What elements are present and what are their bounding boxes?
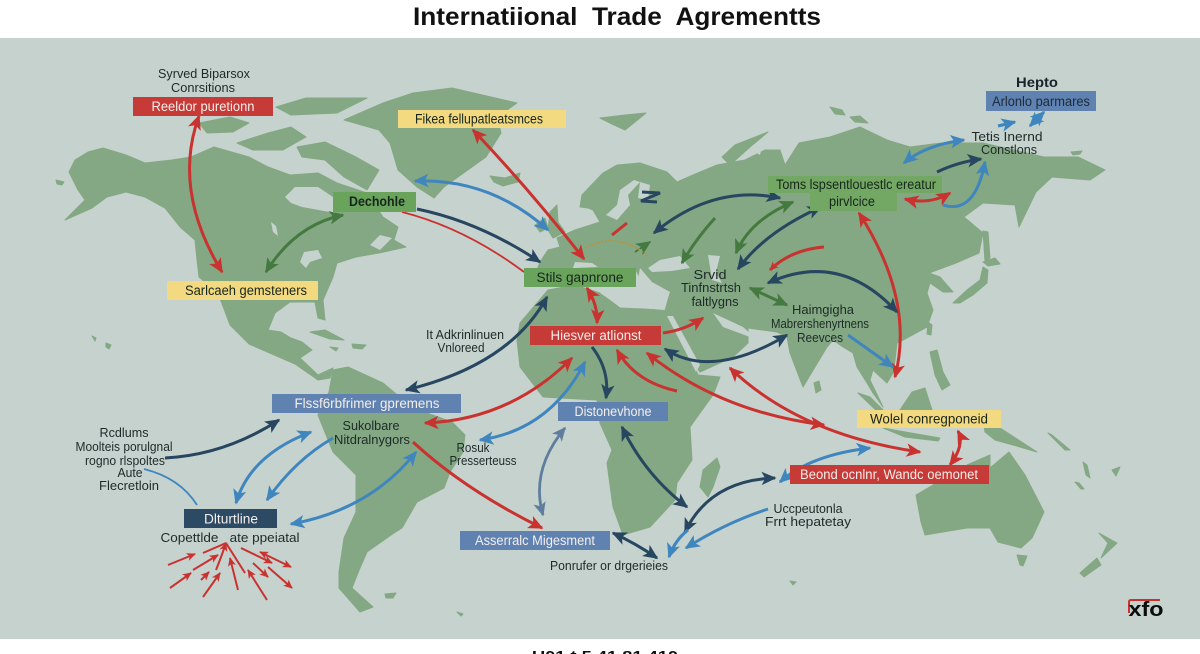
caption: central asia: Srvid — [694, 267, 726, 282]
arrow: blue pacific two — [267, 438, 333, 500]
caption: pacific: Rcdlums — [100, 425, 149, 440]
caption: south africa: Ponrufer or drgerieies — [550, 558, 668, 573]
arrow: navy atlantic south — [406, 297, 547, 390]
caption: south atlantic — [450, 440, 517, 468]
caption: Hepto: Hepto — [1016, 74, 1058, 90]
land: Madagascar — [700, 458, 720, 497]
label: navy pacific: Dlturtline — [204, 512, 258, 526]
label: red top left: Reeldor puretionn — [152, 99, 254, 114]
label: blue africa: Distonevhone — [574, 404, 652, 419]
caption: far east: Constlons — [981, 142, 1037, 157]
arrow: blue atlantic — [415, 181, 548, 230]
land: Eurasia — [535, 127, 1105, 407]
arrow: navy africa to india — [665, 335, 787, 362]
caption: atlantic: Vnloreed — [438, 340, 484, 355]
arrow: red greenland to europe — [473, 130, 584, 259]
arrow: green central asia — [750, 288, 787, 305]
caption: india: Reevces — [797, 330, 843, 345]
arrow: navy indian ocean — [685, 478, 775, 532]
label: blue africa — [558, 402, 668, 421]
arrow: navy russia — [654, 195, 780, 233]
label: red top left — [133, 97, 273, 116]
title: Internatiional Trade Agrementts — [413, 3, 821, 31]
caption: india — [771, 302, 869, 345]
label: blue far east: Arlonlo parmares — [992, 94, 1090, 109]
caption: pacific: rogno rlspoltes — [85, 453, 165, 468]
water: Hudson Bay — [285, 187, 335, 213]
land: Greenland — [344, 88, 517, 198]
caption: indian ocean — [765, 501, 852, 529]
caption: indian ocean: Frrt hepatetay — [765, 514, 852, 529]
arrow: red short europe — [612, 223, 627, 235]
label: yellow north america: Sarlcaeh gemsteners — [185, 283, 307, 298]
arrow: red africa to india ocean — [647, 353, 824, 425]
caption: atlantic — [426, 327, 504, 355]
arrow: thin red atlantic — [402, 212, 524, 272]
label: yellow south-east asia — [857, 410, 1001, 428]
arrow: red to arabia — [663, 318, 703, 333]
label: yellow north america — [167, 281, 318, 300]
land: Caribbean islands — [310, 330, 366, 351]
label: green europe — [524, 268, 636, 287]
land: small south atlantic islands — [385, 593, 463, 616]
caption: top left: Syrved Biparsox — [158, 66, 250, 81]
caption: india: Haimgigha — [792, 302, 855, 317]
arrow: navy southern africa — [622, 427, 687, 507]
caption: far east: Tetis Inernd — [972, 129, 1042, 144]
arrow: red south atlantic — [413, 442, 542, 528]
arrow: red arabian sea — [730, 368, 920, 452]
land: North America — [65, 147, 406, 380]
caption: pacific: Aute — [118, 465, 142, 480]
arrow: red north america — [190, 116, 222, 272]
arrow: red far east — [905, 193, 950, 201]
caption: south america: Nitdralnygors — [334, 432, 410, 447]
land: British Isles — [535, 205, 565, 238]
arrow: blue east siberia — [904, 140, 964, 163]
arrow: green short europe — [635, 242, 650, 252]
land: Africa — [517, 285, 720, 535]
land: Sri Lanka and Japan — [814, 258, 1000, 393]
land: Arctic Ocean islands — [600, 107, 1082, 155]
land: Tasmania and New Zealand — [790, 433, 1120, 585]
caption: central asia: faltlygns — [692, 294, 739, 309]
arrows between trade labels — [144, 112, 1044, 558]
arrow: red europe to africa — [587, 288, 597, 323]
caption: top left: Conrsitions — [171, 80, 235, 95]
caption: atlantic: It Adkrinlinuen — [426, 327, 504, 342]
arrow cluster: red burst — [168, 543, 292, 600]
label: yellow top: Fikea fellupatleatsmces — [415, 112, 543, 126]
label: yellow top — [398, 110, 566, 128]
caption: india: Mabrershenyrtnens — [771, 316, 869, 331]
arrow: green russia — [736, 202, 793, 253]
land: Sakhalin — [983, 231, 990, 262]
label: blue south atlantic — [460, 531, 610, 550]
arrow: blue short to label — [998, 122, 1015, 126]
arrow: navy east siberia — [937, 159, 981, 172]
caption: below navy label: Copettlde ate ppeiatal — [160, 530, 300, 545]
arrow: blue double near label — [1030, 112, 1044, 126]
water: inland seas — [573, 130, 765, 372]
arrow: green north america — [266, 215, 343, 272]
arrow: red central asia — [770, 247, 824, 270]
arrow: blue to africa tip — [686, 509, 768, 548]
arrow: navy pacific — [165, 420, 279, 458]
arrow: blue across south america — [291, 452, 416, 524]
arrow: blue to south-east asia — [848, 335, 893, 367]
land: South-East Asian islands — [858, 350, 1037, 452]
caption: south atlantic: Rosuk — [456, 440, 490, 455]
label: blue south america — [272, 394, 461, 413]
label: green north america — [333, 192, 416, 212]
water: Great Lakes — [271, 222, 392, 268]
land: Iceland — [490, 173, 520, 186]
caption: top left — [158, 66, 250, 95]
label: red indian ocean: Beond ocnlnr, Wandc oemonet — [800, 467, 978, 482]
caption: central asia — [681, 267, 741, 309]
land: South America — [318, 367, 465, 612]
arrow: green west russia — [682, 218, 715, 263]
arrow: navy zigzag — [641, 192, 660, 202]
caption: south america: Sukolbare — [342, 418, 400, 433]
arrow: navy russia two — [738, 207, 821, 269]
label: blue south atlantic: Asserralc Migesment — [475, 533, 595, 548]
arrow: red siberia to south-east asia — [859, 213, 900, 377]
caption: pacific: Flecretloin — [99, 478, 159, 493]
label: yellow south-east asia: Wolel conregponeid — [870, 412, 988, 426]
arrow: red near australia — [950, 431, 960, 465]
label: green russia: Toms lspsentlouestlc ereatur — [776, 177, 936, 192]
land: Australia — [916, 452, 1044, 548]
arrow: navy south africa — [613, 533, 657, 558]
label: green russia — [768, 176, 942, 211]
caption: indian ocean: Uccpeutonla — [774, 501, 843, 516]
arrow: blue far east — [943, 162, 985, 207]
arrow: blue indian ocean — [780, 448, 870, 482]
label: green russia: pirvlcice — [829, 194, 875, 209]
caption: south america — [334, 418, 410, 447]
arrow: blue africa to south atlantic — [480, 362, 585, 440]
caption: pacific — [76, 425, 173, 493]
caption: south atlantic: Presserteuss — [450, 453, 517, 468]
arrow: navy africa down — [592, 347, 607, 398]
map: continents — [56, 88, 1120, 616]
land: Arctic islands — [56, 98, 379, 349]
arrow: navy atlantic — [417, 209, 540, 262]
arrow: dashed route across europe — [585, 241, 650, 258]
arrow: navy central asia — [768, 272, 897, 312]
arrow: red africa to south america — [425, 358, 572, 423]
arrow: blue pacific one — [236, 432, 311, 503]
land: Novaya Zemlya — [722, 132, 768, 165]
label: green north america: Dechohle — [349, 194, 405, 209]
label: navy pacific — [184, 509, 277, 528]
label: red africa — [530, 326, 661, 345]
label: blue south america: Flssf6rbfrimer gpremens — [294, 396, 440, 411]
arrow: blue short south — [669, 530, 688, 557]
arrow: thin blue pacific — [144, 469, 197, 505]
arrow: red east africa — [617, 350, 677, 391]
label: green europe: Stils gapnrone — [536, 270, 624, 285]
caption: pacific: Moolteis porulgnal — [76, 439, 173, 454]
logo: xfo: xfo — [1128, 599, 1164, 621]
label: red africa: Hiesver atlionst — [550, 328, 642, 343]
arrow: slate south atlantic — [539, 428, 565, 515]
caption: central asia: Tinfnstrtsh — [681, 280, 741, 295]
caption: far east — [972, 129, 1042, 157]
